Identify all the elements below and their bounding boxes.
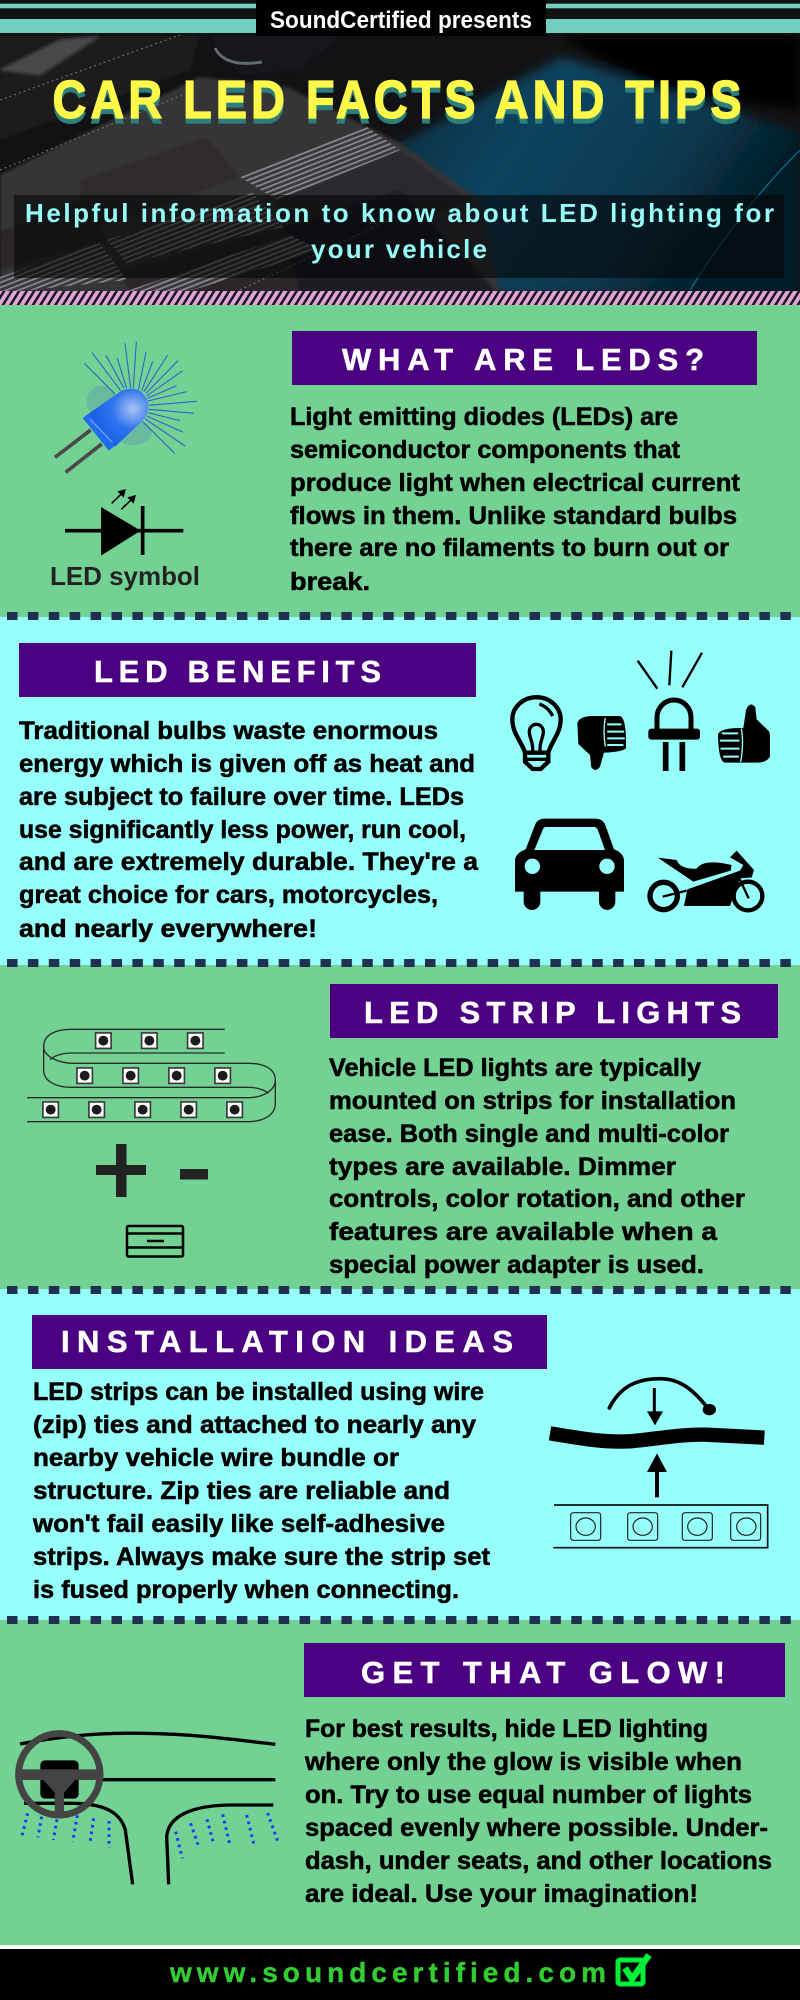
- text: LED strip lights: Vehicle LED lights are typically: [329, 1054, 701, 1082]
- icon: LED outline: [638, 651, 702, 771]
- text: LED benefits: great choice for cars, motorcycles,: [19, 881, 438, 909]
- text: LED benefits: Traditional bulbs waste enormous: [19, 717, 438, 745]
- text: what are LEDs: Light emitting diodes (LEDs) are: [290, 403, 678, 431]
- LED symbol caption: LED symbol: [50, 561, 200, 591]
- text: installation ideas: is fused properly when connecting.: [33, 1576, 459, 1604]
- text: installation ideas: won't fail easily like self-adhesive: [32, 1510, 445, 1538]
- text: LED benefits: and nearly everywhere!: [19, 915, 317, 943]
- icon: zip tie on wire bundle with LED strip: [550, 1379, 768, 1548]
- heading: LED benefits: [19, 643, 476, 697]
- heading: get that glow: [304, 1643, 785, 1697]
- icon: light bulb: [512, 697, 561, 769]
- text: get that glow: are ideal. Use your imagination!: [305, 1880, 698, 1908]
- heading: LED benefits: LED BENEFITS: [94, 654, 381, 689]
- heading: what are LEDs: [292, 331, 757, 385]
- text: what are LEDs: flows in them. Unlike standard bulbs: [290, 502, 737, 530]
- text: what are LEDs: produce light when electrical current: [290, 469, 741, 497]
- text: what are LEDs: break.: [290, 568, 370, 596]
- text: what are LEDs: there are no filaments to burn out or: [290, 534, 729, 562]
- text: get that glow: [304, 1715, 772, 1908]
- text: installation ideas: LED strips can be installed using wire: [33, 1378, 484, 1406]
- icon group: bulb, LED, car and motorcycle: [512, 651, 770, 910]
- text: LED benefits: energy which is given off as heat and: [19, 750, 475, 778]
- text: installation ideas: nearby vehicle wire bundle or: [33, 1444, 399, 1472]
- icon: LED strip: [27, 1029, 275, 1122]
- text: get that glow: where only the glow is visible when: [304, 1748, 742, 1776]
- footer: [0, 1945, 800, 2000]
- text: installation ideas: strips. Always make sure the strip set: [33, 1543, 491, 1571]
- heading: what are LEDs: WHAT ARE LEDS?: [342, 342, 704, 377]
- panel: installation ideas: [0, 1286, 800, 1620]
- text: LED strip lights: controls, color rotation, and other: [329, 1185, 745, 1213]
- text: get that glow: spaced evenly where possible. Under-: [305, 1814, 768, 1842]
- text: LED strip lights: special power adapter is used.: [329, 1251, 704, 1279]
- heading: installation ideas: INSTALLATION IDEAS: [61, 1324, 513, 1359]
- icon: check box: [618, 1955, 649, 1984]
- icon: glowing blue LED: [55, 342, 197, 472]
- text: installation ideas: (zip) ties and attached to nearly any: [33, 1411, 476, 1439]
- text: LED benefits: [19, 717, 479, 943]
- icon: LED circuit symbol: [65, 489, 183, 556]
- hatched divider: [0, 291, 800, 305]
- text: get that glow: For best results, hide LED lighting: [305, 1715, 708, 1743]
- subtitle: Helpful information to know about LED lighting for: [25, 198, 774, 228]
- heading: installation ideas: [32, 1315, 547, 1369]
- text: LED strip lights: features are available when a: [329, 1218, 718, 1246]
- text: LED benefits: and are extremely durable. They're a: [19, 848, 479, 876]
- heading: LED strip lights: [330, 984, 778, 1038]
- icon: thumbs up: [718, 705, 770, 763]
- icon: thumbs down: [577, 716, 626, 770]
- icon: car: [515, 819, 624, 910]
- title: CAR LED FACTS AND TIPS: [52, 74, 742, 135]
- text: LED strip lights: types are available. Dimmer: [329, 1153, 676, 1181]
- header panel: [0, 0, 800, 305]
- title: CAR LED FACTS AND TIPS: [52, 69, 742, 130]
- background photo of car seats with blue LED glow: [0, 0, 800, 305]
- text: LED benefits: use significantly less power, run cool,: [19, 816, 466, 844]
- subtitle: [14, 195, 784, 278]
- text: get that glow: on. Try to use equal number of lights: [305, 1781, 752, 1809]
- panel: LED benefits: [0, 612, 800, 965]
- text: what are LEDs: semiconductor components that: [290, 436, 681, 464]
- icon: power adapter: [127, 1226, 183, 1256]
- panel: get that glow: [0, 1616, 800, 1945]
- subtitle: your vehicle: [311, 234, 487, 264]
- icon: motorcycle: [650, 882, 677, 910]
- text: LED strip lights: ease. Both single and multi-color: [329, 1120, 729, 1148]
- text: LED strip lights: mounted on strips for installation: [329, 1087, 736, 1115]
- text: LED strip lights: [329, 1054, 745, 1279]
- text: get that glow: dash, under seats, and other locations: [305, 1847, 772, 1875]
- heading: LED strip lights: LED STRIP LIGHTS: [364, 995, 741, 1030]
- text: installation ideas: [32, 1378, 491, 1604]
- top ribbon bars: [0, 4, 800, 33]
- presenter label: SoundCertified presents: [270, 7, 532, 34]
- panel: LED strip lights: [0, 959, 800, 1289]
- text: installation ideas: structure. Zip ties are reliable and: [33, 1477, 450, 1505]
- text: LED benefits: are subject to failure over time. LEDs: [19, 783, 464, 811]
- heading: get that glow: GET THAT GLOW!: [361, 1655, 725, 1690]
- icon: plus and minus: [96, 1144, 208, 1197]
- panel: what are LEDs: [0, 305, 800, 617]
- icon: dashboard with LED under-dash glow: [19, 1733, 279, 1884]
- text: what are LEDs: [290, 403, 741, 596]
- website url: www.soundcertified.com: [169, 1957, 606, 1988]
